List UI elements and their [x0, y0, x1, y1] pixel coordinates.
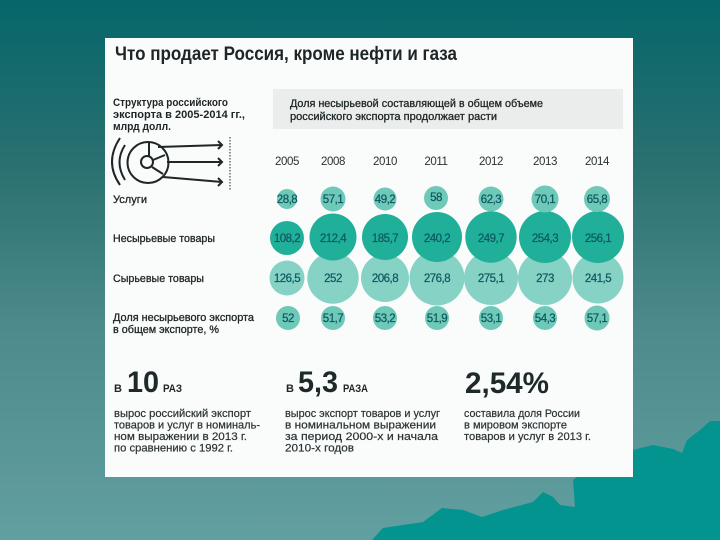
year headers: 2014	[585, 156, 610, 168]
stat: 2.54 percent: в мировом экспорте	[464, 420, 567, 432]
bubble row: services: 58	[430, 192, 442, 204]
teal mountains	[372, 421, 720, 540]
bubble row: non-resource share	[276, 306, 610, 330]
row label: non-resource share: Доля несырьевого экспорта	[113, 312, 255, 324]
stat: 10 times: товаров и услуг в номиналь-	[114, 420, 260, 432]
bubble row: resource goods	[270, 250, 624, 306]
year headers: 2011	[424, 156, 448, 168]
bubble row: resource goods: 126,5	[274, 273, 300, 285]
bubble row: non-resource goods	[270, 211, 624, 263]
stat: 2.54 percent: товаров и услуг в 2013 г.	[464, 431, 591, 443]
stat: 10 times: вырос российский экспорт	[114, 408, 251, 420]
stat: 5.3 times: 5,3	[298, 366, 338, 399]
bubble row: resource goods: 275,1	[478, 273, 504, 285]
stat: 2.54 percent: составила доля России	[464, 408, 580, 420]
bubble row: services: 28,8	[277, 194, 297, 206]
stat: 5.3 times: РАЗА	[343, 383, 368, 395]
structure heading	[113, 97, 245, 133]
structure heading: экспорта в 2005-2014 гг.,	[113, 109, 245, 121]
row label: non-resource share: в общем экспорте, %	[113, 324, 219, 336]
bubble row: resource goods: 241,5	[585, 273, 611, 285]
stat: 2.54 percent: 2,54%	[465, 367, 549, 400]
stat: 5.3 times	[285, 366, 440, 454]
year headers: 2012	[479, 156, 503, 168]
stat: 5.3 times: за период 2000-х и начала	[285, 431, 439, 443]
stat: 5.3 times: 2010-х годов	[285, 442, 354, 454]
bubble row: services: 62,3	[481, 194, 501, 206]
callout: share of non-resource exports: российского экспорта продолжает расти	[290, 111, 497, 123]
bubble row: non-resource goods: 249,7	[478, 233, 504, 245]
row label: non-resource share	[113, 312, 255, 336]
stat: 10 times: ном выражении в 2013 г.	[114, 431, 247, 443]
icon: pie with arrows	[112, 137, 230, 190]
title: Что продает Россия, кроме нефти и газа	[115, 44, 457, 65]
stat: 5.3 times: в номинальном выражении	[285, 420, 436, 432]
bubble row: services: 65,8	[587, 194, 607, 206]
stat: 10 times: В	[114, 383, 122, 395]
stat: 10 times	[114, 366, 260, 454]
bubble row: resource goods: 206,8	[372, 273, 398, 285]
bubble row: resource goods: 252	[324, 273, 342, 285]
stat: 10 times: РАЗ	[163, 383, 182, 395]
bubble row: non-resource share: 51,9	[427, 313, 447, 325]
bubble row: services: 49,2	[375, 194, 395, 206]
bubble row: non-resource share: 53,2	[375, 313, 395, 325]
bubble row: resource goods: 276,8	[424, 273, 450, 285]
year headers: 2008	[321, 156, 345, 168]
row label: services: Услуги	[113, 194, 147, 206]
structure heading: Структура российского	[113, 97, 228, 109]
bubble row: services: 70,1	[535, 194, 555, 206]
bubble row: non-resource goods: 256,1	[585, 233, 611, 245]
infographic card	[105, 38, 633, 477]
bubble row: services: 57,1	[323, 194, 343, 206]
bubble row: non-resource goods: 254,3	[532, 233, 558, 245]
bubble row: non-resource share: 53,1	[481, 313, 501, 325]
stat: 5.3 times: В	[286, 383, 294, 395]
bubble row: non-resource share: 54,3	[535, 313, 555, 325]
bubble row: services	[277, 186, 610, 212]
year headers: 2005	[275, 156, 299, 168]
year headers: 2013	[533, 156, 557, 168]
row label: resource goods: Сырьевые товары	[113, 273, 204, 285]
stat: 5.3 times: вырос экспорт товаров и услуг	[285, 408, 440, 420]
stat: 10 times: 10	[127, 366, 159, 399]
callout: share of non-resource exports	[273, 89, 623, 129]
callout: share of non-resource exports: Доля несырьевой составляющей в общем объеме	[290, 98, 543, 110]
row label: non-resource goods: Несырьевые товары	[113, 233, 215, 245]
stat: 10 times: по сравнению с 1992 г.	[114, 442, 233, 454]
bubble row: non-resource goods: 185,7	[372, 233, 398, 245]
stat: 2.54 percent	[464, 367, 591, 443]
structure heading: млрд долл.	[113, 121, 171, 133]
bubble row: non-resource goods: 240,2	[424, 233, 450, 245]
bubble row: resource goods: 273	[536, 273, 554, 285]
bubble row: non-resource share: 52	[282, 313, 294, 325]
year headers	[275, 156, 610, 168]
bubble row: non-resource share: 57,1	[587, 313, 607, 325]
year headers: 2010	[373, 156, 397, 168]
bubble row: non-resource goods: 108,2	[274, 233, 300, 245]
bubble row: non-resource share: 51,7	[323, 313, 343, 325]
bubble row: non-resource goods: 212,4	[320, 233, 347, 245]
